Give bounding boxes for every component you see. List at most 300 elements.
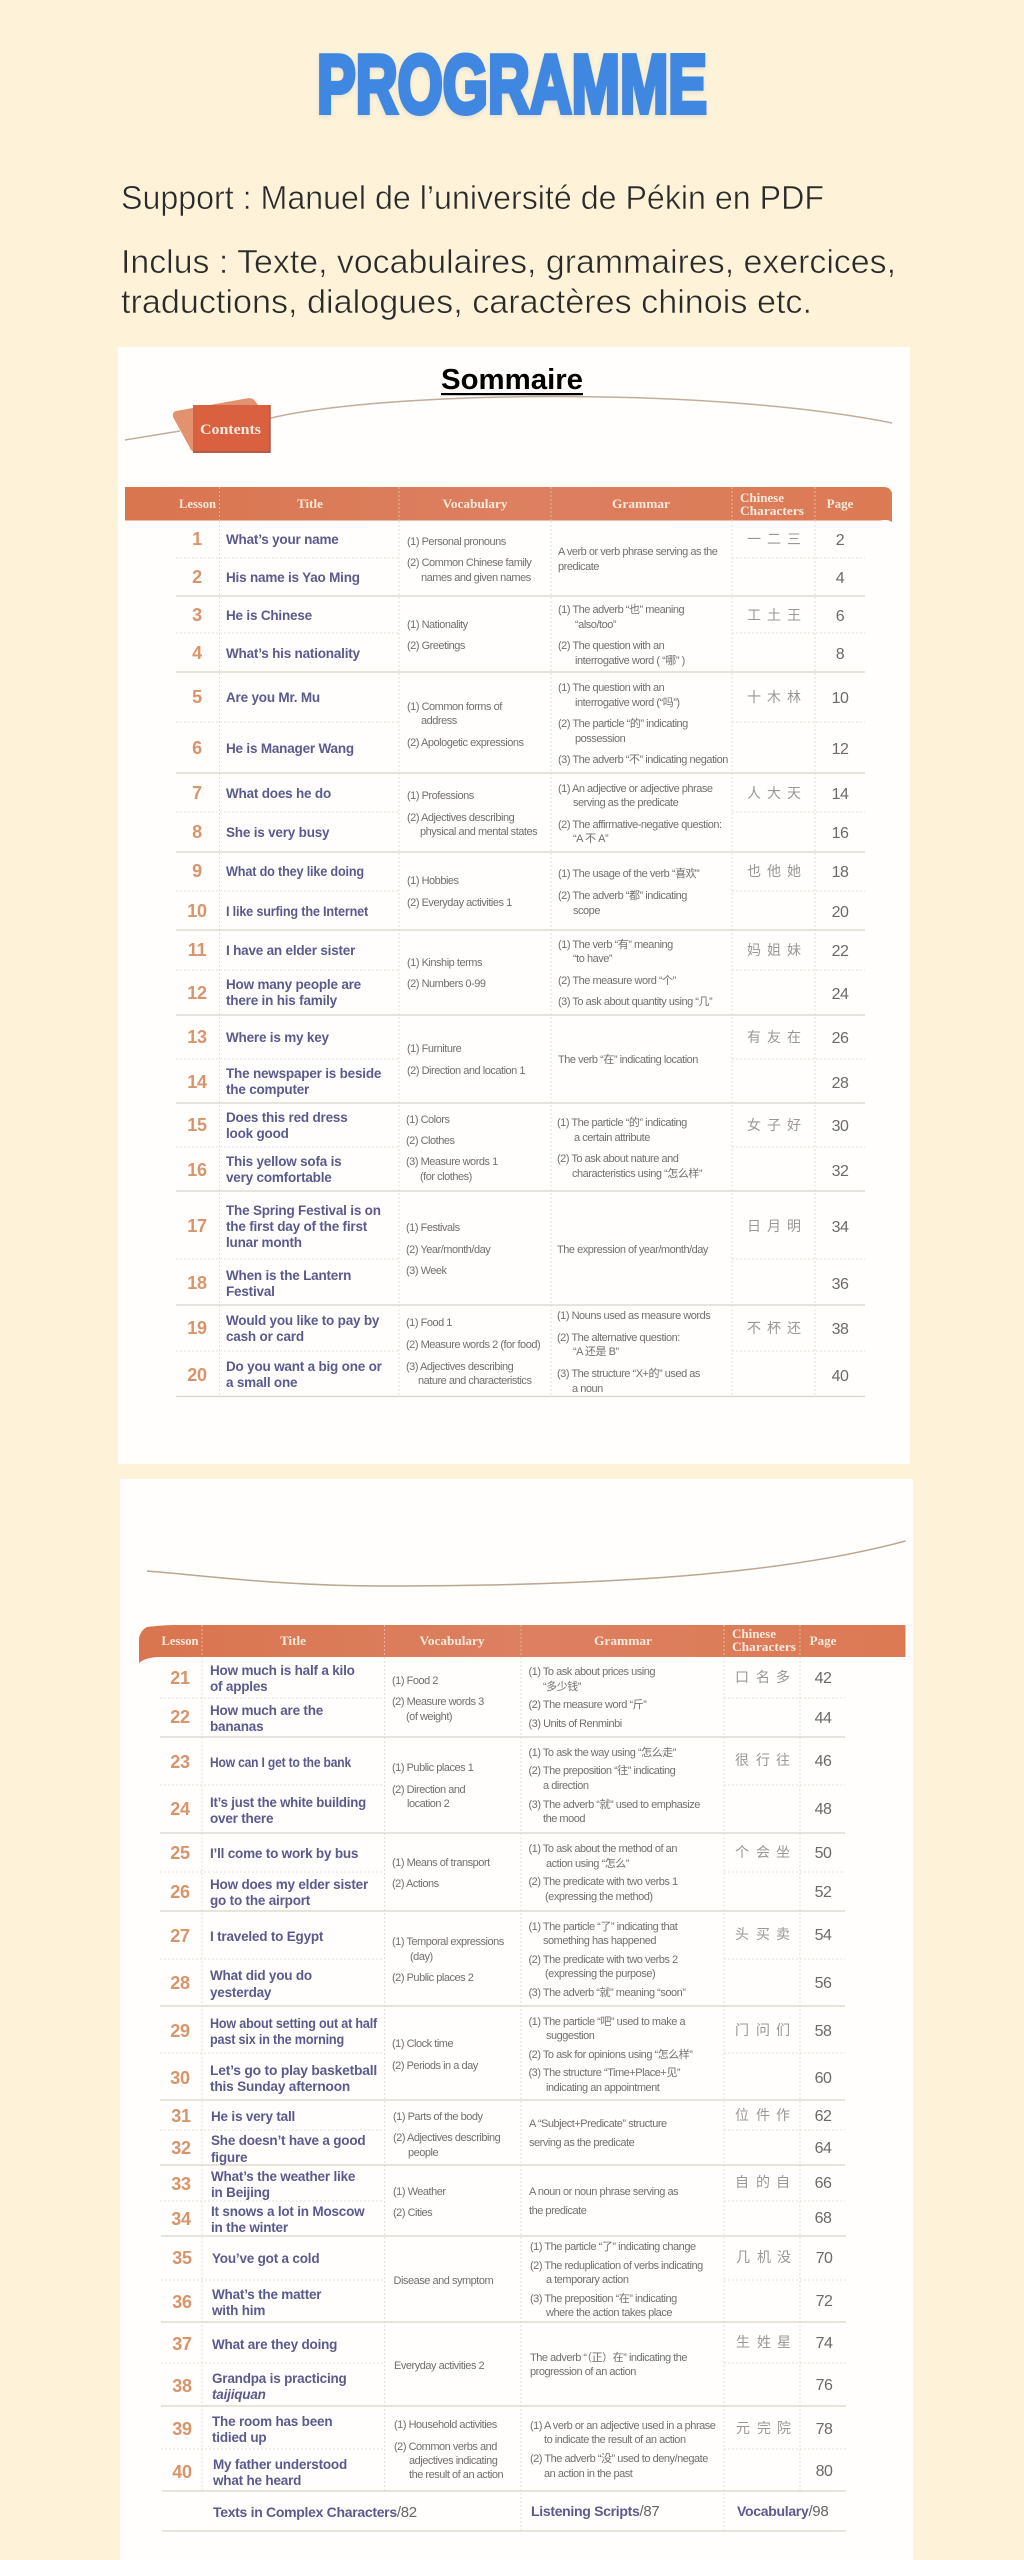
lessons 35-36: where the action takes place <box>545 2307 672 2319</box>
badge: contents <box>173 398 270 453</box>
lessons 11-12: 11 <box>188 940 206 960</box>
lessons 7-8: (1) Professions <box>407 790 475 802</box>
lessons 27-28: yesterday <box>210 1985 272 2000</box>
lessons 7-8: (1) An adjective or adjective phrase <box>558 783 713 795</box>
lessons 19-20: nature and characteristics <box>418 1375 532 1387</box>
lessons 27-28 <box>170 1920 832 2000</box>
lessons 31-32: (1) Parts of the body <box>393 2111 484 2123</box>
lessons 3-4: (1) Nationality <box>407 619 469 631</box>
lessons 33-34: (2) Cities <box>393 2207 433 2219</box>
table header: Characters <box>740 503 804 518</box>
lessons 39-40: (2) Common verbs and <box>394 2441 497 2453</box>
lessons 7-8: physical and mental states <box>420 826 538 838</box>
lessons 29-30: (1) Clock time <box>392 2038 453 2050</box>
lessons 35-36: (3) The preposition “在” indicating <box>530 2292 677 2305</box>
badge: contents: Contents <box>200 422 261 438</box>
lessons 25-26: 26 <box>170 1882 190 1902</box>
title: PROGRAMME <box>317 38 707 130</box>
lessons 25-26: action using “怎么” <box>546 1856 630 1870</box>
lessons 37-38: 生姓星 <box>736 2334 791 2350</box>
lessons 39-40: 80 <box>816 2463 833 2480</box>
lessons 13-14: the computer <box>226 1082 310 1097</box>
lessons 7-8: 14 <box>832 786 849 803</box>
table header: Grammar <box>594 1633 652 1648</box>
lessons 23-24: 23 <box>170 1752 190 1772</box>
lessons 27-28: (2) The predicate with two verbs 2 <box>528 1954 678 1966</box>
lessons 21-22: 22 <box>170 1707 190 1727</box>
lessons 17-18: (2) Year/month/day <box>406 1244 491 1256</box>
table header: Chinese <box>740 490 784 505</box>
lessons 17-18: 日月明 <box>747 1218 801 1234</box>
lessons 23-24: the mood <box>543 1813 585 1825</box>
lessons 23-24: (1) To ask the way using “怎么走” <box>528 1745 677 1759</box>
lessons 21-22 <box>170 1663 832 1734</box>
lessons 1-2: What’s your name <box>226 532 339 547</box>
lessons 29-30 <box>170 2016 832 2094</box>
lessons 21-22: (1) Food 2 <box>392 1675 438 1687</box>
lessons 37-38: 74 <box>816 2335 833 2352</box>
lessons 25-26: (1) To ask about the method of an <box>528 1843 677 1855</box>
lessons 9-10: I like surfing the Internet <box>226 904 369 919</box>
lessons 31-32 <box>171 2106 832 2165</box>
lessons 7-8 <box>192 783 849 845</box>
lessons 1-2: 4 <box>836 570 845 587</box>
lessons 9-10: (1) Hobbies <box>407 875 460 887</box>
lessons 17-18: 17 <box>187 1216 207 1236</box>
table grid lines <box>176 521 865 1396</box>
lessons 29-30: 门问们 <box>735 2022 790 2038</box>
lessons 31-32: He is very tall <box>211 2109 295 2124</box>
lessons 9-10: 也他她 <box>747 863 801 879</box>
panel: sommaire page 1 <box>118 347 910 1464</box>
lessons 33-34: 68 <box>815 2210 832 2227</box>
lessons 11-12: there in his family <box>226 993 338 1008</box>
lessons 17-18: lunar month <box>226 1235 302 1250</box>
lessons 27-28: 54 <box>815 1927 832 1944</box>
lessons 39-40: (1) Household activities <box>394 2419 498 2431</box>
lessons 21-22: of apples <box>210 1679 267 1694</box>
lessons 33-34: 66 <box>815 2175 832 2192</box>
lessons 11-12: (1) Kinship terms <box>407 957 483 969</box>
lessons 5-6 <box>192 682 849 766</box>
lessons 7-8: “A 不 A” <box>573 833 609 845</box>
lessons 29-30: past six in the morning <box>210 2032 344 2047</box>
lessons 39-40: 78 <box>816 2421 833 2438</box>
lessons 13-14: 13 <box>187 1027 207 1047</box>
text block: support and contents: Support : Manuel de l’université de Pékin en PDF <box>121 179 824 216</box>
lessons 39-40: 元完院 <box>736 2420 791 2436</box>
lessons 17-18: 36 <box>832 1276 849 1293</box>
lessons 19-20: 38 <box>832 1321 849 1338</box>
lessons 31-32: 32 <box>171 2138 191 2158</box>
lessons 39-40: (2) The adverb “没” used to deny/negate <box>530 2452 708 2465</box>
lessons 21-22: (2) Measure words 3 <box>392 1696 484 1708</box>
lessons 11-12: (2) Numbers 0-99 <box>407 978 486 990</box>
lessons 29-30: (3) The structure “Time+Place+见” <box>528 2067 681 2079</box>
lessons 9-10: (1) The usage of the verb “喜欢” <box>558 866 700 880</box>
lessons 35-36: You’ve got a cold <box>212 2251 319 2266</box>
lessons 1-2: (2) Common Chinese family <box>407 557 532 569</box>
lessons 39-40: tidied up <box>212 2430 266 2445</box>
table header: Title <box>280 1633 306 1648</box>
lessons 15-16: characteristics using “怎么样” <box>572 1166 703 1180</box>
lessons 5-6: He is Manager Wang <box>226 741 354 756</box>
lessons 19-20: cash or card <box>226 1329 304 1344</box>
lessons 37-38: What are they doing <box>212 2337 337 2352</box>
lessons 5-6: (3) The adverb “不” indicating negation <box>558 754 728 766</box>
lessons 3-4: (2) The question with an <box>558 640 665 652</box>
lessons 7-8: 7 <box>192 783 202 803</box>
table header <box>125 487 892 522</box>
lessons 1-2: names and given names <box>421 572 532 584</box>
lessons 27-28: (day) <box>410 1951 433 1963</box>
table header <box>139 1625 906 1663</box>
lessons 3-4: 3 <box>192 605 202 625</box>
lessons 3-4: (1) The adverb “也” meaning <box>558 603 684 616</box>
lessons 21-22: 42 <box>815 1670 832 1687</box>
lessons 27-28: (3) The adverb “就” meaning “soon” <box>528 1985 686 1999</box>
lessons 21-22: (3) Units of Renminbi <box>528 1718 622 1730</box>
lessons 19-20: Would you like to pay by <box>226 1313 380 1328</box>
table grid lines <box>160 1657 846 2531</box>
lessons 7-8: 16 <box>832 825 849 842</box>
table header: Page <box>827 496 854 511</box>
lessons 9-10: scope <box>573 905 600 917</box>
lessons 19-20: a noun <box>572 1383 603 1395</box>
lessons 17-18: 34 <box>832 1219 849 1236</box>
text block: support and contents <box>121 179 896 320</box>
lessons 19-20: 不杯还 <box>747 1320 801 1336</box>
lessons 25-26: How does my elder sister <box>210 1877 369 1892</box>
lessons 1-2: 一二三 <box>747 531 801 547</box>
lessons 27-28: I traveled to Egypt <box>210 1929 324 1944</box>
lessons 33-34: 自的自 <box>735 2174 790 2190</box>
curve ornament <box>125 396 892 440</box>
lessons 11-12: 24 <box>832 986 849 1003</box>
lessons 1-2: predicate <box>558 561 599 573</box>
lessons 15-16: (3) Measure words 1 <box>406 1156 498 1168</box>
lessons 31-32: 64 <box>815 2140 832 2157</box>
lessons 25-26 <box>170 1843 832 1908</box>
lessons 29-30: (2) To ask for opinions using “怎么样” <box>528 2047 693 2061</box>
lessons 1-2: His name is Yao Ming <box>226 570 360 585</box>
lessons 39-40: the result of an action <box>409 2469 503 2481</box>
lessons 35-36: 35 <box>172 2248 192 2268</box>
lessons 25-26: (expressing the method) <box>545 1891 653 1903</box>
lessons 17-18: When is the Lantern <box>226 1268 351 1283</box>
lessons 5-6: address <box>421 715 458 727</box>
lessons 9-10: 18 <box>832 864 849 881</box>
lessons 31-32: 位件作 <box>735 2107 790 2123</box>
lessons 29-30: 58 <box>815 2023 832 2040</box>
lessons 19-20: (2) The alternative question: <box>557 1332 680 1344</box>
lessons 35-36: 几机没 <box>736 2249 791 2265</box>
lessons 35-36: (2) The reduplication of verbs indicating <box>530 2260 703 2272</box>
lessons 9-10: 20 <box>832 904 849 921</box>
lessons 29-30: 30 <box>170 2068 190 2088</box>
lessons 21-22: bananas <box>210 1719 263 1734</box>
lessons 39-40: to indicate the result of an action <box>544 2434 686 2446</box>
lessons 9-10: (2) The adverb “都” indicating <box>558 889 687 902</box>
lessons 13-14: The verb “在” indicating location <box>558 1053 698 1066</box>
lessons 29-30: indicating an appointment <box>546 2082 660 2094</box>
lessons 5-6: Are you Mr. Mu <box>226 690 320 705</box>
lessons 29-30: How about setting out at half <box>210 2016 378 2031</box>
lessons 9-10: What do they like doing <box>226 864 364 879</box>
lessons 13-14: 28 <box>832 1075 849 1092</box>
lessons 17-18: (1) Festivals <box>406 1222 461 1234</box>
lessons 29-30: (1) The particle “吧” used to make a <box>528 2016 686 2028</box>
lessons 21-22: 口名多 <box>735 1669 790 1685</box>
lessons 5-6: (2) The particle “的” indicating <box>558 716 688 730</box>
lessons 19-20: (1) Nouns used as measure words <box>557 1310 711 1322</box>
lessons 17-18: The expression of year/month/day <box>557 1244 709 1256</box>
lessons 27-28: something has happened <box>543 1935 656 1947</box>
lessons 3-4: “also/too” <box>575 619 617 631</box>
lessons 25-26: I’ll come to work by bus <box>210 1846 358 1861</box>
lessons 21-22: (1) To ask about prices using <box>528 1666 655 1678</box>
lessons 23-24: How can I get to the bank <box>210 1755 352 1770</box>
lessons 31-32: figure <box>211 2150 248 2165</box>
lessons 29-30: (2) Periods in a day <box>392 2060 479 2072</box>
lessons 13-14 <box>187 1027 849 1097</box>
lessons 15-16: (1) The particle “的” indicating <box>557 1115 687 1129</box>
lessons 11-12: (3) To ask about quantity using “几” <box>558 996 713 1008</box>
lessons 29-30: 60 <box>815 2070 832 2087</box>
lessons 11-12 <box>187 937 849 1008</box>
lessons 27-28: What did you do <box>210 1968 312 1983</box>
lessons 39-40: what he heard <box>212 2473 301 2488</box>
table header: Vocabulary <box>442 496 508 511</box>
lessons 13-14: Where is my key <box>226 1030 329 1045</box>
lessons 39-40: The room has been <box>212 2414 332 2429</box>
lessons 3-4: 8 <box>836 646 845 663</box>
lessons 21-22: How much is half a kilo <box>210 1663 355 1678</box>
lessons 23-24: 很行往 <box>735 1752 790 1768</box>
lessons 27-28: (1) The particle “了” indicating that <box>528 1920 678 1933</box>
lessons 35-36: a temporary action <box>546 2274 629 2286</box>
lessons 27-28: 56 <box>815 1975 832 1992</box>
lessons 37-38: Grandpa is practicing <box>212 2371 347 2386</box>
lessons 33-34: 33 <box>171 2174 191 2194</box>
lessons 31-32: (2) Adjectives describing <box>393 2132 501 2144</box>
table header: Page <box>810 1633 837 1648</box>
lessons 37-38: taijiquan <box>212 2387 266 2402</box>
lessons 21-22: (2) The measure word “斤” <box>528 1698 647 1711</box>
lessons 3-4: 6 <box>836 608 845 625</box>
lessons 13-14: 26 <box>832 1030 849 1047</box>
lessons 1-2 <box>192 529 845 587</box>
lessons 23-24: a direction <box>543 1780 589 1792</box>
lessons 15-16: look good <box>226 1126 289 1141</box>
lessons 23-24: over there <box>210 1811 274 1826</box>
lessons 19-20: (1) Food 1 <box>406 1317 452 1329</box>
panel: sommaire page 2 <box>120 1479 913 2560</box>
lessons 19-20: a small one <box>226 1375 298 1390</box>
lessons 5-6: (1) The question with an <box>558 682 665 694</box>
lessons 37-38: 76 <box>816 2377 833 2394</box>
lessons 9-10 <box>187 861 849 921</box>
lessons 23-24: 46 <box>815 1753 832 1770</box>
lessons 5-6: 12 <box>832 741 849 758</box>
lessons 5-6: (1) Common forms of <box>407 701 503 713</box>
lessons 37-38: Everyday activities 2 <box>394 2360 485 2372</box>
lessons 23-24: (3) The adverb “就” used to emphasize <box>528 1797 700 1811</box>
lessons 11-12: 22 <box>832 943 849 960</box>
lessons 35-36: What’s the matter <box>212 2287 322 2302</box>
lessons 23-24: It’s just the white building <box>210 1795 366 1810</box>
lessons 3-4: 工土王 <box>747 607 801 623</box>
lessons 33-34 <box>171 2169 832 2235</box>
lessons 37-38: 38 <box>172 2376 192 2396</box>
lessons 33-34: 34 <box>171 2209 191 2229</box>
lessons 11-12: How many people are <box>226 977 362 992</box>
lessons 35-36: with him <box>211 2303 265 2318</box>
table header: Lesson <box>179 496 217 511</box>
lessons 29-30: this Sunday afternoon <box>210 2079 350 2094</box>
lessons 21-22: 21 <box>170 1668 190 1688</box>
lessons 37-38 <box>172 2334 833 2402</box>
lessons 5-6: interrogative word (“吗”) <box>575 696 680 709</box>
lessons 11-12: I have an elder sister <box>226 943 356 958</box>
lessons 27-28: 27 <box>170 1926 190 1946</box>
lessons 21-22: (of weight) <box>406 1711 452 1723</box>
lessons 5-6: 6 <box>192 738 202 758</box>
lessons 15-16: (1) Colors <box>406 1114 450 1126</box>
lessons 1-2: A verb or verb phrase serving as the <box>558 546 718 558</box>
text block: support and contents: traductions, dialogues, caractères chinois etc. <box>121 283 812 320</box>
lessons 37-38: progression of an action <box>530 2366 636 2378</box>
lessons 33-34: What’s the weather like <box>211 2169 356 2184</box>
lessons 39-40: My father understood <box>213 2457 347 2472</box>
lessons 15-16: Does this red dress <box>226 1110 348 1125</box>
lessons 1-2: 2 <box>836 532 845 549</box>
lessons 5-6: 10 <box>832 690 849 707</box>
lessons 3-4: interrogative word ( “哪” ) <box>575 654 685 667</box>
lessons 11-12: 妈姐妹 <box>747 942 801 958</box>
lessons 27-28: (1) Temporal expressions <box>392 1936 505 1948</box>
lessons 33-34: in Beijing <box>211 2185 270 2200</box>
lessons 19-20: (3) The structure “X+的” used as <box>557 1366 701 1380</box>
lessons 3-4: What’s his nationality <box>226 646 361 661</box>
lessons 15-16: 16 <box>187 1160 207 1180</box>
lessons 19-20: “A 还是 B” <box>573 1345 619 1358</box>
lessons 33-34: the predicate <box>529 2205 587 2217</box>
footer references: Listening Scripts/87 <box>531 2503 659 2520</box>
lessons 5-6: possession <box>575 733 626 745</box>
lessons 7-8: 人大天 <box>747 785 801 801</box>
lessons 19-20: 20 <box>187 1365 207 1385</box>
lessons 1-2: 1 <box>192 529 202 549</box>
lessons 1-2: (1) Personal pronouns <box>407 536 507 548</box>
lessons 7-8: She is very busy <box>226 825 330 840</box>
lessons 19-20: Do you want a big one or <box>226 1359 383 1374</box>
lessons 23-24: 24 <box>170 1799 190 1819</box>
lessons 17-18: the first day of the first <box>226 1219 368 1234</box>
lessons 33-34: A noun or noun phrase serving as <box>529 2186 679 2198</box>
lessons 27-28: 28 <box>170 1973 190 1993</box>
lessons 13-14: (2) Direction and location 1 <box>407 1065 525 1077</box>
table header: Title <box>297 496 323 511</box>
lessons 27-28: (expressing the purpose) <box>545 1968 655 1980</box>
lessons 1-2: 2 <box>192 567 202 587</box>
lessons 27-28: (2) Public places 2 <box>392 1972 474 1984</box>
lessons 13-14: 14 <box>187 1072 207 1092</box>
lessons 25-26: 52 <box>815 1884 832 1901</box>
lessons 9-10: 10 <box>187 901 207 921</box>
lessons 9-10: 9 <box>192 861 202 881</box>
lessons 11-12: (2) The measure word “个” <box>558 974 677 987</box>
lessons 15-16: very comfortable <box>226 1170 332 1185</box>
lessons 15-16: (2) Clothes <box>406 1135 455 1147</box>
table header: Grammar <box>612 496 670 511</box>
lessons 13-14: (1) Furniture <box>407 1043 462 1055</box>
lessons 19-20: (3) Adjectives describing <box>406 1361 514 1373</box>
lessons 17-18: (3) Week <box>406 1265 448 1277</box>
lessons 25-26: (2) The predicate with two verbs 1 <box>528 1876 678 1888</box>
lessons 33-34: (1) Weather <box>393 2186 446 2198</box>
table header: Vocabulary <box>420 1633 485 1648</box>
lessons 25-26: (1) Means of transport <box>392 1857 490 1869</box>
lessons 15-16: 女子好 <box>747 1117 801 1133</box>
lessons 25-26: 个会坐 <box>735 1844 790 1860</box>
lessons 39-40: adjectives indicating <box>409 2455 498 2467</box>
lessons 7-8: 8 <box>192 822 202 842</box>
lessons 23-24: (2) The preposition “往” indicating <box>528 1763 676 1777</box>
lessons 31-32: serving as the predicate <box>529 2137 635 2149</box>
lessons 15-16: 30 <box>832 1118 849 1135</box>
lessons 23-24 <box>170 1745 832 1826</box>
lessons 15-16: 15 <box>187 1115 207 1135</box>
lessons 31-32: She doesn’t have a good <box>211 2133 365 2148</box>
heading: sommaire: Sommaire <box>441 364 583 396</box>
lessons 11-12: 12 <box>187 983 207 1003</box>
lessons 31-32: 31 <box>171 2106 191 2126</box>
lessons 23-24: (2) Direction and <box>392 1784 466 1796</box>
lessons 35-36: Disease and symptom <box>394 2275 494 2287</box>
lessons 3-4: 4 <box>192 643 202 663</box>
lessons 33-34: It snows a lot in Moscow <box>211 2204 365 2219</box>
lessons 39-40: 39 <box>172 2419 192 2439</box>
lessons 15-16: This yellow sofa is <box>226 1154 342 1169</box>
lessons 17-18: Festival <box>226 1284 275 1299</box>
lessons 11-12: (1) The verb “有” meaning <box>558 937 673 951</box>
lessons 23-24: location 2 <box>407 1798 450 1810</box>
table header: Chinese <box>732 1626 776 1641</box>
table header: Lesson <box>162 1633 199 1648</box>
lessons 29-30: suggestion <box>546 2030 595 2042</box>
lessons 37-38: 37 <box>172 2334 192 2354</box>
lessons 23-24: 48 <box>815 1801 832 1818</box>
lessons 7-8: (2) The affirmative-negative question: <box>558 819 722 831</box>
lessons 3-4 <box>192 603 845 667</box>
lessons 21-22: How much are the <box>210 1703 324 1718</box>
lessons 39-40: (1) A verb or an adjective used in a phrase <box>530 2420 716 2432</box>
lessons 31-32: A “Subject+Predicate” structure <box>529 2118 667 2130</box>
lessons 19-20: 40 <box>832 1368 849 1385</box>
lessons 25-26: 25 <box>170 1843 190 1863</box>
curve ornament <box>147 1541 906 1586</box>
lessons 13-14: The newspaper is beside <box>226 1066 382 1081</box>
footer references: Vocabulary/98 <box>737 2503 828 2520</box>
lessons 31-32: people <box>408 2147 439 2159</box>
lessons 21-22: 44 <box>815 1710 832 1727</box>
lessons 7-8: serving as the predicate <box>573 797 679 809</box>
lessons 3-4: (2) Greetings <box>407 640 466 652</box>
lessons 15-16: a certain attribute <box>574 1132 650 1144</box>
lessons 5-6: 5 <box>192 687 202 707</box>
lessons 35-36: 36 <box>172 2292 192 2312</box>
